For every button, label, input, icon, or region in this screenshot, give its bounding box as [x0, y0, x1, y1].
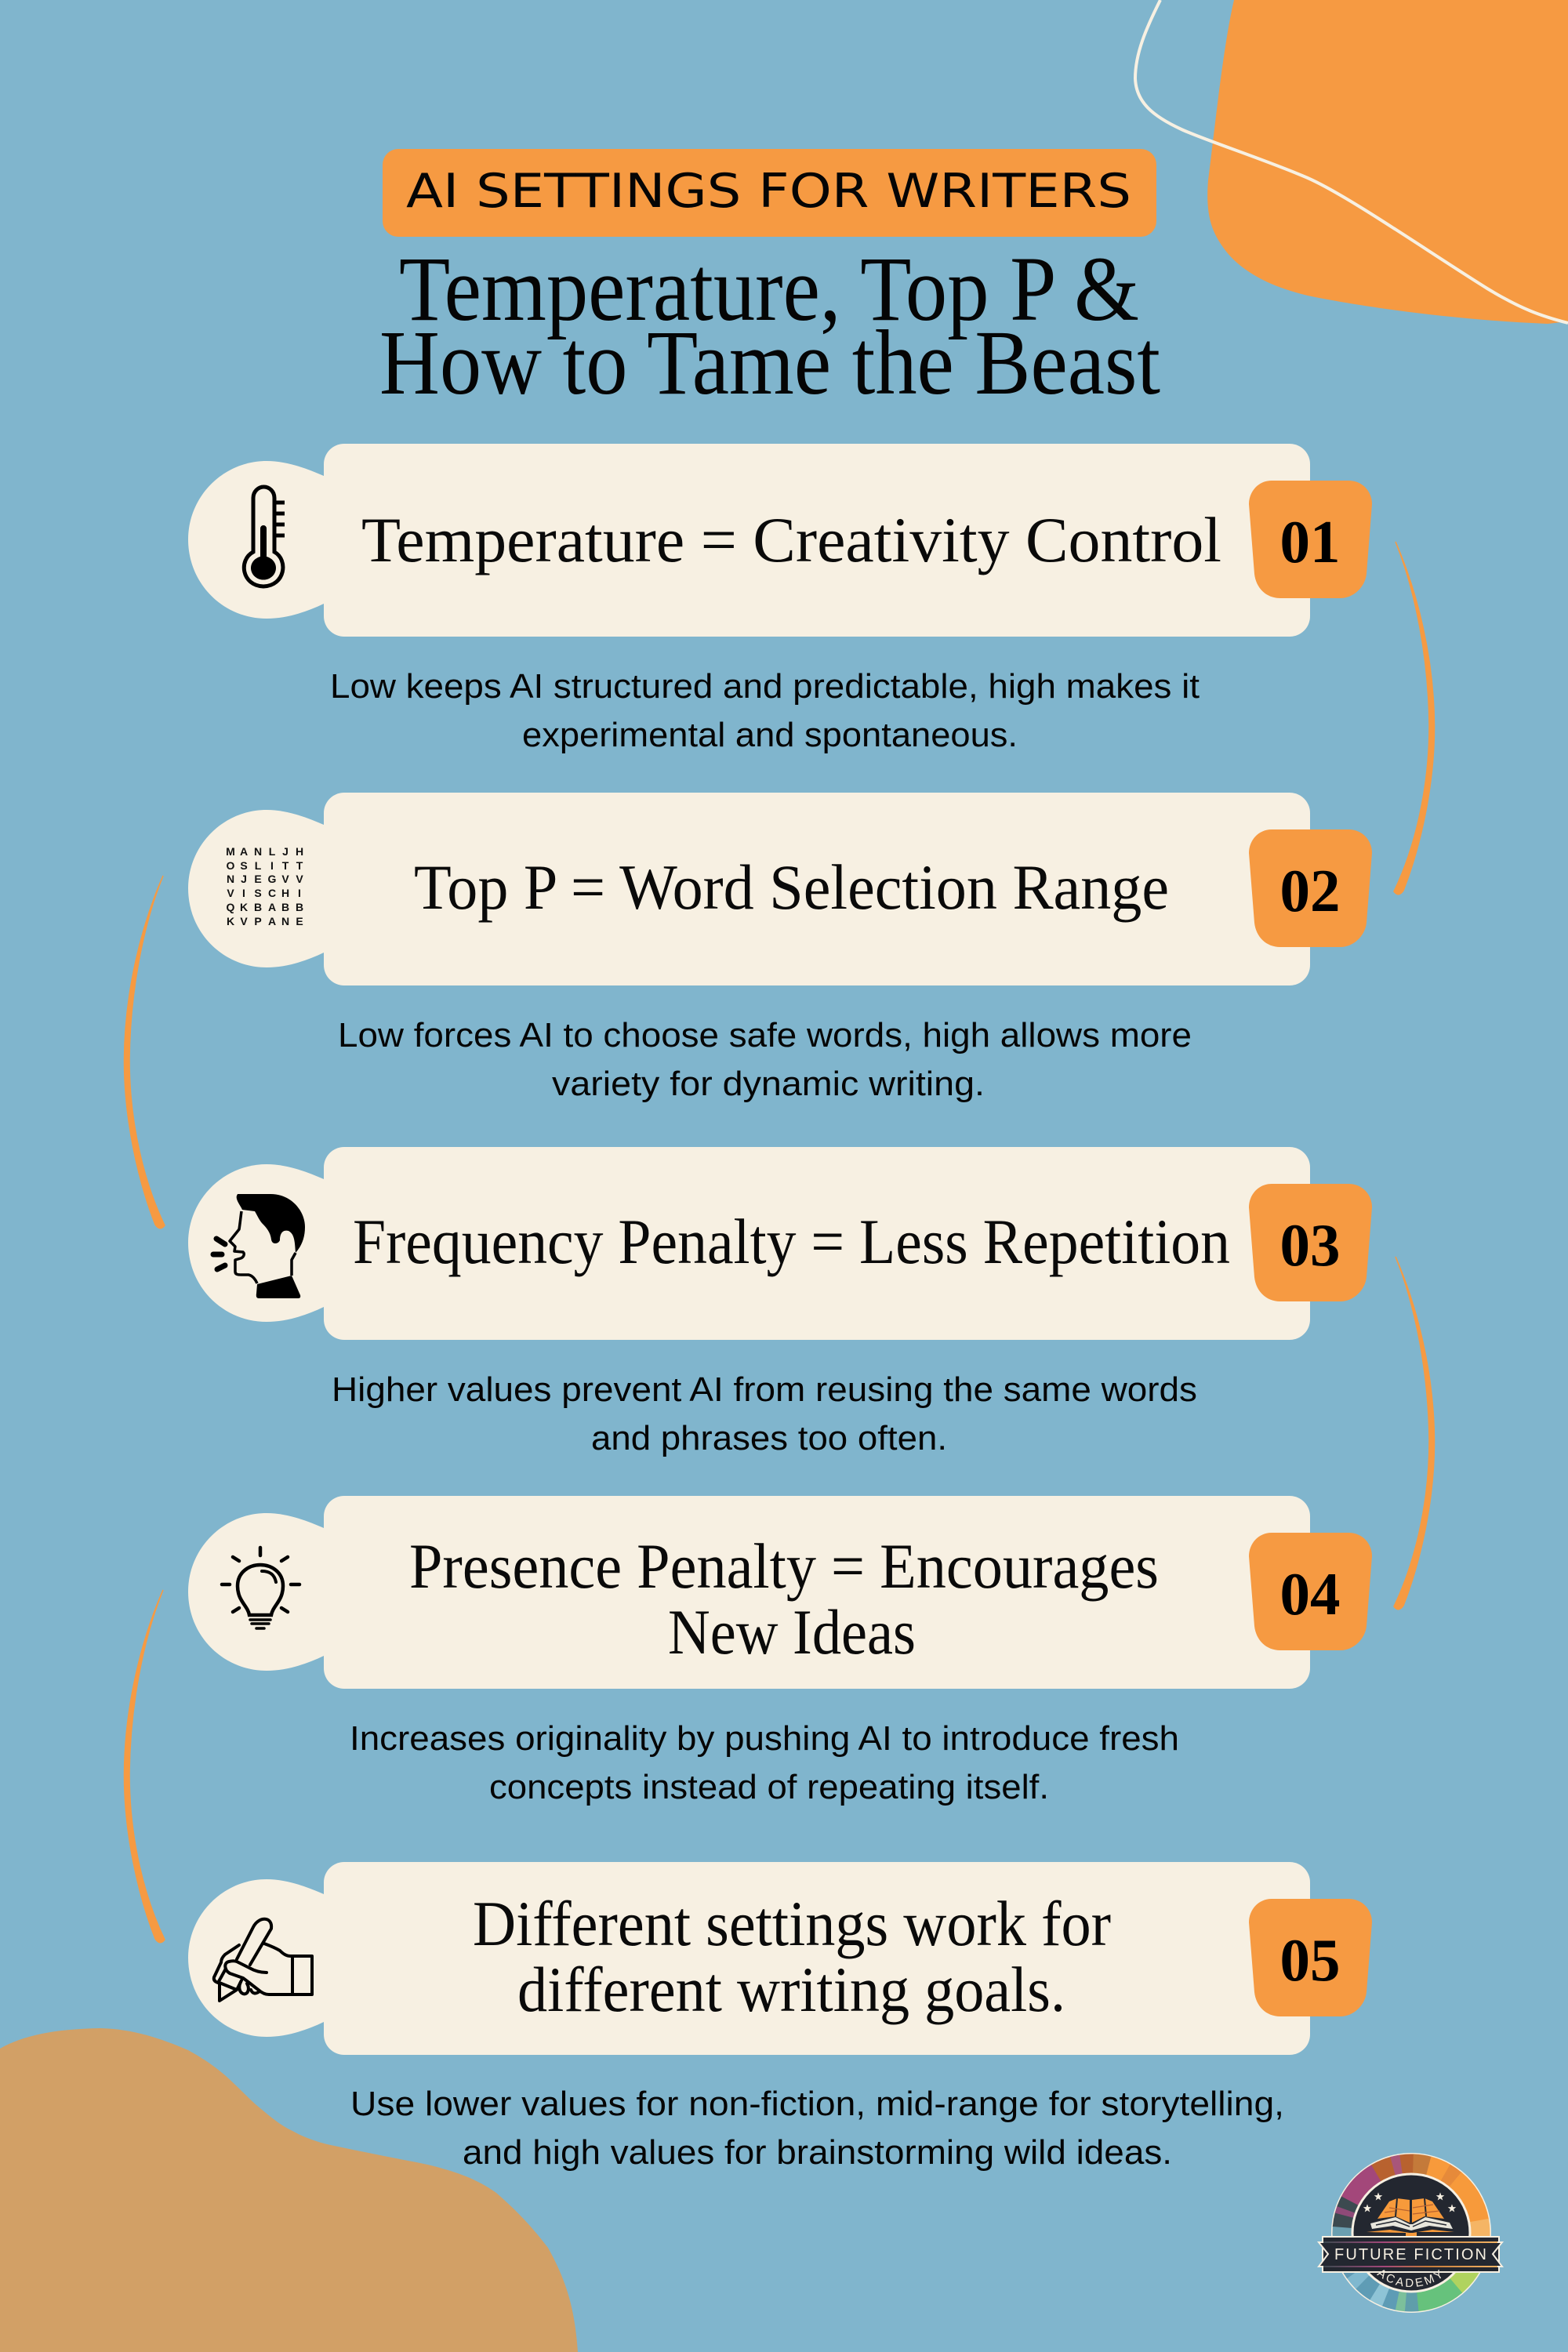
text block: step 5 description: and high values for brainstorming wild ideas. [463, 2133, 1172, 2172]
text block: step 1 description [330, 667, 1200, 754]
icon: word search grid: J [241, 873, 247, 885]
icon: word search grid: S [254, 887, 262, 899]
badge: 01: 01 [1279, 508, 1341, 575]
icon: word search grid: V [281, 873, 289, 885]
badge: 02: 02 [1279, 857, 1341, 924]
badge: 05 [1249, 1899, 1372, 2016]
badge: 01 [1249, 481, 1372, 598]
decorative cream line top right [1135, 0, 1568, 323]
icon: word search grid: B [254, 901, 262, 913]
curved text: academy: ACADEMY [1377, 2269, 1441, 2287]
heading: temperature: Temperature = Creativity Control [361, 504, 1221, 575]
icon: word search grid: K [227, 915, 234, 927]
panel: step 5 different settings [188, 1862, 1372, 2055]
text block: step 1 description: Low keeps AI structured and predictable, high makes it [330, 667, 1200, 706]
icon: word search grid: A [268, 915, 276, 927]
badge: 03: 03 [1279, 1211, 1341, 1279]
icon: word search grid [226, 845, 303, 927]
icon: word search grid: C [268, 887, 276, 899]
icon: word search grid: T [296, 859, 303, 872]
tag: AI settings for writers [383, 149, 1156, 237]
icon: word search grid: B [281, 901, 289, 913]
icon: word search grid: N [227, 873, 234, 885]
title [379, 238, 1160, 414]
icon: word search grid: G [268, 873, 277, 885]
icon: word search grid: V [227, 887, 234, 899]
icon: word search grid: N [254, 845, 262, 858]
icon: word search grid: V [296, 873, 303, 885]
icon: word search grid: M [226, 845, 235, 858]
icon: word search grid: L [269, 845, 276, 858]
decorative tan blob bottom left [0, 2028, 578, 2352]
heading: presence penalty [409, 1530, 1159, 1668]
panel: step 1 temperature [188, 444, 1372, 637]
icon: word search grid: A [268, 901, 276, 913]
icon: word search grid: O [227, 859, 235, 872]
heading: presence penalty: New Ideas [668, 1596, 916, 1668]
icon: word search grid: Q [227, 901, 235, 913]
tag: AI settings for writers: AI SETTINGS FOR WRITERS [406, 164, 1131, 219]
text block: step 4 description [350, 1719, 1179, 1806]
icon: word search grid: J [282, 845, 289, 858]
icon: word search grid: H [281, 887, 289, 899]
connector arc: step 1 to 2 [1394, 542, 1435, 895]
badge: 02 [1249, 829, 1372, 947]
heading: different settings [473, 1888, 1111, 2025]
text block: step 1 description: experimental and spontaneous. [522, 716, 1018, 754]
icon: word search grid: I [270, 859, 274, 872]
badge: 03 [1249, 1184, 1372, 1301]
icon: word search grid: E [254, 873, 262, 885]
icon: word search grid: N [281, 915, 289, 927]
curved text: academy [1377, 2269, 1441, 2287]
icon: word search grid: L [255, 859, 262, 872]
icon: word search grid: H [296, 845, 303, 858]
icon: light bulb [222, 1548, 299, 1628]
heading: different settings: different writing goals. [517, 1954, 1065, 2025]
panel: step 3 frequency penalty [188, 1147, 1372, 1340]
text block: step 3 description: and phrases too often. [591, 1419, 947, 1457]
text block: step 4 description: concepts instead of repeating itself. [489, 1768, 1049, 1806]
icon: word search grid: I [242, 887, 245, 899]
text block: step 2 description: variety for dynamic writing. [552, 1065, 985, 1103]
icon: word search grid: K [240, 901, 248, 913]
icon: open book [1367, 2198, 1454, 2236]
heading: top p: Top P = Word Selection Range [414, 851, 1169, 923]
text block: step 2 description: Low forces AI to choose safe words, high allows more [338, 1016, 1192, 1054]
icon: speaking head [213, 1194, 305, 1298]
text block: step 4 description: Increases originality by pushing AI to introduce fresh [350, 1719, 1179, 1758]
ribbon: future fiction: FUTURE FICTION [1334, 2246, 1486, 2263]
badge: 05: 05 [1279, 1926, 1341, 1994]
text block: step 5 description [350, 2085, 1284, 2172]
connector arc: step 4 to 5 [124, 1590, 165, 1943]
icon: word search grid: B [296, 901, 303, 913]
icon: thermometer [244, 487, 285, 586]
decorative orange blob top right [1207, 0, 1568, 324]
text block: step 3 description [332, 1370, 1197, 1457]
title: Temperature, Top P & [399, 238, 1139, 340]
panel: step 2 top p [188, 793, 1372, 985]
title: How to Tame the Beast [379, 311, 1160, 414]
icon: word search grid: I [298, 887, 301, 899]
logo: future fiction academy [1317, 2153, 1504, 2313]
heading: frequency penalty: Frequency Penalty = Less Repetition [353, 1206, 1230, 1277]
icon: word search grid: A [240, 845, 248, 858]
panel: step 4 presence penalty [188, 1496, 1372, 1689]
text block: step 5 description: Use lower values for non-fiction, mid-range for storytelling, [350, 2085, 1284, 2123]
connector arc: step 2 to 3 [124, 876, 165, 1229]
text block: step 3 description: Higher values prevent AI from reusing the same words [332, 1370, 1197, 1409]
icon: word search grid: V [240, 915, 248, 927]
icon: word search grid: E [296, 915, 303, 927]
heading: different settings: Different settings work for [473, 1888, 1111, 1959]
badge: 04: 04 [1279, 1560, 1341, 1628]
badge: 04 [1249, 1533, 1372, 1650]
connector arc: step 3 to 4 [1394, 1257, 1435, 1610]
icon: word search grid: P [254, 915, 262, 927]
icon: stars [1363, 2192, 1456, 2212]
text block: step 2 description [338, 1016, 1192, 1103]
icon: word search grid: S [240, 859, 248, 872]
icon: hand writing [214, 1919, 312, 2001]
icon: word search grid: T [282, 859, 289, 872]
ribbon: future fiction [1319, 2237, 1502, 2272]
heading: presence penalty: Presence Penalty = Encourages [409, 1530, 1159, 1602]
